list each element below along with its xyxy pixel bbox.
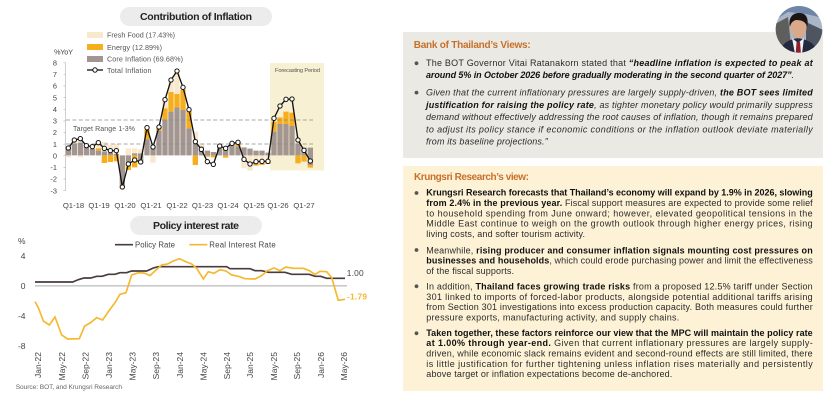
x axis month labels: May-23 <box>128 352 138 380</box>
x axis quarter labels: Q1-22 <box>166 201 188 210</box>
y axis with labels: 5 <box>53 93 57 102</box>
x axis month labels: May-26 <box>339 352 349 380</box>
x axis month labels: Sep-23 <box>151 352 161 379</box>
forecasting period band <box>270 63 324 170</box>
chart: contribution of inflation stacked bars and line <box>50 31 324 210</box>
legend: Real Interest Rate <box>209 240 276 250</box>
legend: Total Inflation <box>107 66 152 75</box>
y axis with labels: 4 <box>53 105 57 114</box>
bullet: MPC policy rate view: at 1.00% through year-end. Given that current inflationary pressures are largely supply- <box>426 338 813 348</box>
y axis with labels: 2 <box>53 128 57 137</box>
bullet: limited justification for raising the rate: from its baseline projections.” <box>426 136 549 146</box>
x axis month labels: Jan-22 <box>33 352 43 378</box>
y axis with labels: 1 <box>53 140 57 149</box>
y axis labels: 4 <box>21 251 26 261</box>
y axis with labels: 3 <box>53 116 57 126</box>
x axis month labels: Jan-26 <box>316 352 326 378</box>
source note: Source: BOT, and Krungsri Research <box>16 384 122 391</box>
x axis quarter labels: Q1-19 <box>88 201 110 210</box>
bullet: MPC policy rate view <box>415 328 813 379</box>
bullet: MPC policy rate view: Taken together, these factors reinforce our view that the MPC will maintain the policy rate <box>426 328 813 338</box>
x axis quarter labels: Q1-18 <box>63 201 84 210</box>
x axis quarter labels: Q1-23 <box>192 201 213 210</box>
bullet: MPC policy rate view: driven, while economic slack remains evident and second-round effects are still limited, there <box>426 349 813 359</box>
bullet: cost pressures: of the fiscal supports. <box>426 266 514 276</box>
bullet: growth forecast: living costs, and softer tourism activity. <box>426 229 585 239</box>
x axis month labels: May-24 <box>198 352 208 380</box>
end value labels: 1.00 <box>347 268 364 278</box>
x axis month labels: May-25 <box>269 352 279 380</box>
x axis month labels: Sep-24 <box>222 352 232 379</box>
x axis month labels: May-22 <box>57 352 67 380</box>
y axis with labels: -1 <box>50 163 57 172</box>
bullet: governor statement <box>415 58 814 80</box>
y axis with labels: -3 <box>50 186 57 195</box>
bullet: trade risks <box>415 282 813 322</box>
x axis month labels <box>33 352 349 380</box>
x axis month labels: Sep-22 <box>80 352 90 379</box>
legend: Fresh Food (17.43%) <box>107 31 175 40</box>
total inflation line with markers <box>66 69 312 189</box>
bullet: cost pressures <box>415 245 813 276</box>
y axis labels: -4 <box>18 311 26 321</box>
x axis quarter labels: Q1-20 <box>114 201 136 210</box>
heading: Bank of Thailand's Views: Bank of Thailand’s Views: <box>414 40 531 51</box>
y axis labels <box>18 236 26 351</box>
target range dashed lines <box>66 120 313 144</box>
heading: Contribution of Inflation <box>120 7 272 26</box>
heading: Policy interest rate <box>130 216 262 235</box>
bullet: limited justification for raising the rate: justification for raising the policy rate, as tighter monetary policy would primarily suppress <box>425 100 813 110</box>
chart: policy and real interest rate <box>18 236 367 380</box>
y axis labels: 0 <box>21 281 26 291</box>
heading: Policy interest rate: Policy interest rate <box>153 220 239 232</box>
panel: Krungsri Research's view <box>403 166 823 391</box>
end value labels <box>347 268 367 302</box>
legend <box>87 31 183 75</box>
heading: Krungsri Research's view: Krungsri Research’s view: <box>414 172 529 183</box>
bullet: growth forecast: Middle East continue to weigh on the growth outlook through higher energy prices, rising <box>426 219 813 229</box>
x axis quarter labels: Q1-21 <box>140 201 162 210</box>
y axis with labels: 0 <box>53 151 57 160</box>
bullet: cost pressures: Meanwhile, rising producer and consumer inflation signals mounting cost pressures on <box>426 245 813 255</box>
y axis with labels <box>50 48 73 195</box>
heading: Contribution of Inflation: Contribution of Inflation <box>140 11 252 23</box>
bullet: MPC policy rate view: above target or inflation expectations become de-anchored. <box>426 369 672 379</box>
bullet: MPC policy rate view: is little justification for further tightening unless inflation rises materially and persistently <box>426 359 813 369</box>
legend: Energy (12.89%) <box>107 43 162 52</box>
x axis quarter labels: Q1-26 <box>267 201 289 210</box>
bullet: growth forecast: to household spending from June onward; however, elevated geopolitical tensions in the <box>426 208 813 218</box>
bullet: trade risks: from Section 301 investigations into excess production capacity. Both measures could further <box>426 302 813 312</box>
bullet: cost pressures: businesses and households, which could erode purchasing power and limit the effectiveness <box>426 256 813 266</box>
legend: Core Inflation (69.68%) <box>107 54 183 64</box>
bullet: growth forecast <box>415 188 813 239</box>
bullet: trade risks: 301 linked to imports of forced-labor products, alongside potential additional tariffs arising <box>426 292 813 302</box>
policy rate line <box>35 267 345 282</box>
legend <box>115 240 276 250</box>
icon: governor portrait <box>775 5 823 54</box>
x axis month labels: Jan-24 <box>175 352 185 378</box>
bullet: limited justification for raising the rate <box>415 88 814 146</box>
y axis with labels: 7 <box>53 70 57 79</box>
bullet: limited justification for raising the rate: to adjust its policy stance if economic conditions or the inflation outlook deviate materially <box>426 124 813 134</box>
real interest rate line <box>35 259 345 339</box>
bullet: limited justification for raising the rate: demand without effectively addressing the root causes of inflation, though it remains prepared <box>426 112 814 122</box>
forecasting period band: Forecasting Period <box>275 68 320 74</box>
bullet: limited justification for raising the rate: Given that the current inflationary pressures are largely supply-driven, the BOT sees limited <box>426 88 813 98</box>
y axis with labels: 6 <box>53 82 57 91</box>
y axis labels: -8 <box>18 341 26 351</box>
y axis with labels: -2 <box>50 175 57 184</box>
target range dashed lines: Target Range 1-3% <box>73 126 135 133</box>
bullet: growth forecast: Krungsri Research forecasts that Thailand’s economy will expand by 1.9% in 2026, slowing <box>426 188 813 198</box>
y axis labels: % <box>18 236 26 246</box>
x axis quarter labels: Q1-27 <box>293 201 315 210</box>
end value labels: -1.79 <box>347 292 367 302</box>
legend: Policy Rate <box>135 240 175 250</box>
x axis quarter labels <box>63 201 315 210</box>
bullet: governor statement: The BOT Governor Vitai Ratanakorn stated that “headline inflation is expected to peak at <box>426 58 814 68</box>
y axis with labels: %YoY <box>54 48 73 56</box>
x axis month labels: Sep-25 <box>292 352 302 379</box>
panel: Bank of Thailand's views <box>403 32 823 158</box>
zero line <box>35 285 347 287</box>
bullet: growth forecast: from 2.4% in the previous year. Fiscal support measures are expected to provide some relief <box>426 198 813 208</box>
x axis quarter labels: Q1-24 <box>217 201 239 210</box>
bullet: trade risks: In addition, Thailand faces growing trade risks from a proposed 12.5% tariff under Section <box>426 282 813 292</box>
bullet: governor statement: around 5% in October 2026 before gradually moderating in the second quarter of 2027”. <box>426 70 794 80</box>
x axis quarter labels: Q1-25 <box>243 201 265 210</box>
y axis with labels: 8 <box>53 58 57 68</box>
bullet: trade risks: pressure exports, manufacturing activity, and supply chains. <box>426 312 679 322</box>
x axis month labels: Jan-25 <box>245 352 255 378</box>
stacked bars: core, energy, fresh food <box>66 73 313 188</box>
x axis month labels: Jan-23 <box>104 352 114 378</box>
